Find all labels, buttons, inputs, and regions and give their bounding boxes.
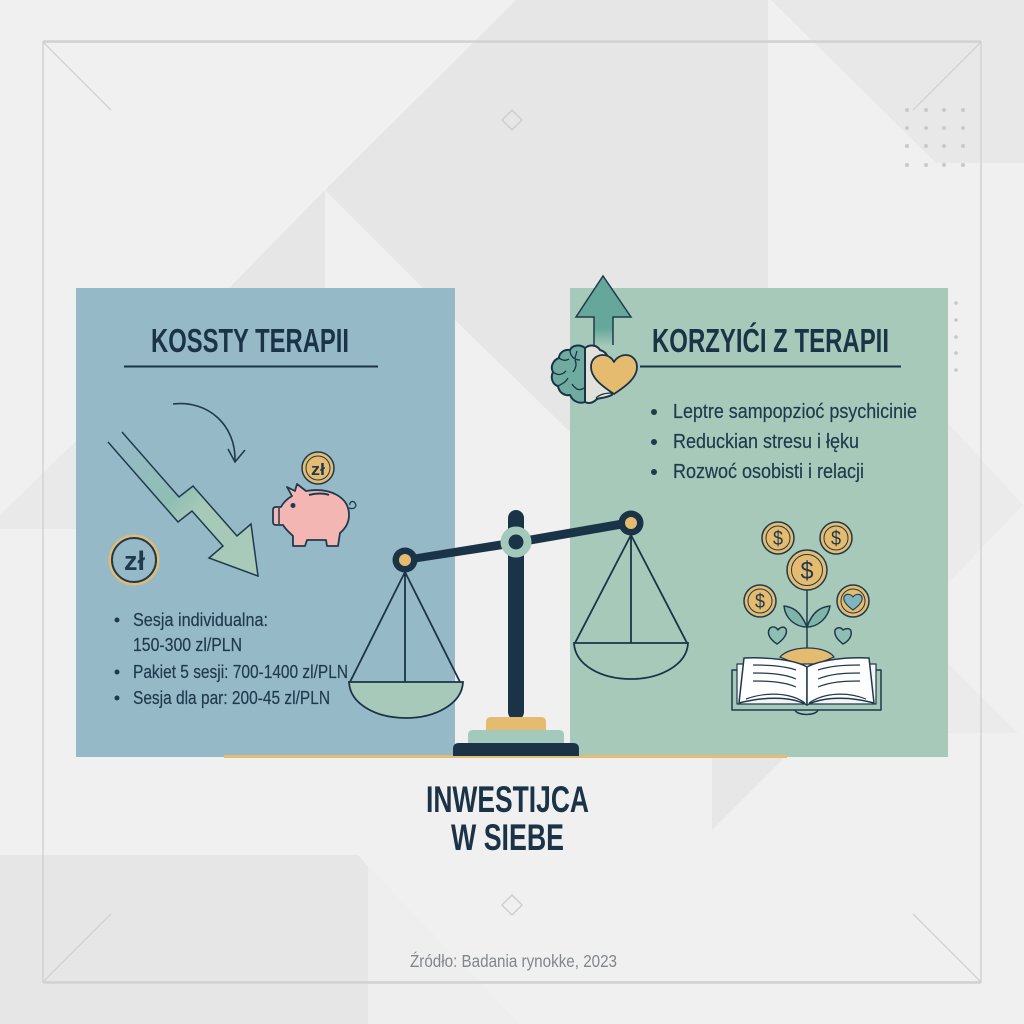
list: benefits (651, 401, 917, 483)
balance scale (349, 510, 688, 756)
icon: up arrow (576, 276, 631, 346)
right pan (574, 510, 688, 679)
coins (744, 522, 869, 617)
icon: book with growing coins: $ (773, 528, 783, 550)
icon: piggy bank with coin: zł (311, 460, 325, 479)
heading underline: costs (124, 366, 378, 368)
source note: Źródło: Badania rynokke, 2023 (410, 951, 617, 971)
icon: curved arrow (173, 404, 245, 462)
list: benefits: Rozwoć osobisti i relacji (673, 461, 864, 483)
heading: benefits: KORZYIĆI Z TERAPII (652, 322, 889, 359)
central title (426, 779, 589, 858)
icon: brain with heart (552, 346, 637, 403)
icon: piggy bank with coin (273, 452, 356, 546)
scale post (508, 510, 524, 720)
central title: INWESTIJCA (426, 779, 589, 820)
gold baseline (224, 755, 787, 758)
scale base (453, 717, 579, 756)
list: session prices: Sesja dla par: 200-45 zl/PLN (133, 688, 330, 708)
mound (780, 648, 834, 668)
heading underline: benefits (640, 366, 901, 368)
icon: book with growing coins (732, 522, 881, 714)
panel: costs of therapy (76, 288, 455, 757)
stem and leaves (768, 590, 851, 648)
icon: falling arrow (108, 432, 258, 576)
icon: book with growing coins: $ (831, 528, 841, 550)
list: session prices: 150-300 zl/PLN (133, 635, 242, 655)
book (732, 658, 881, 714)
icon: zloty coin: zł (124, 546, 145, 576)
list: session prices (114, 610, 348, 708)
scale beam (405, 518, 631, 564)
heading: costs: KOSSTY TERAPII (151, 322, 349, 359)
list: benefits: Leptre sampopzioć psychicinie (673, 401, 917, 423)
central title: W SIEBE (451, 817, 564, 858)
centre pivot (500, 526, 532, 558)
icon: book with growing coins: $ (755, 591, 765, 613)
list: benefits: Reduckian stresu i łęku (673, 431, 859, 453)
list: session prices: Sesja individualna: (133, 610, 268, 630)
icon: book with growing coins: $ (800, 557, 814, 585)
panel: benefits of therapy (552, 276, 948, 757)
list: session prices: Pakiet 5 sesji: 700-1400 zl/PLN (133, 662, 348, 682)
left pan (349, 548, 463, 718)
icon: zloty coin (108, 534, 160, 586)
